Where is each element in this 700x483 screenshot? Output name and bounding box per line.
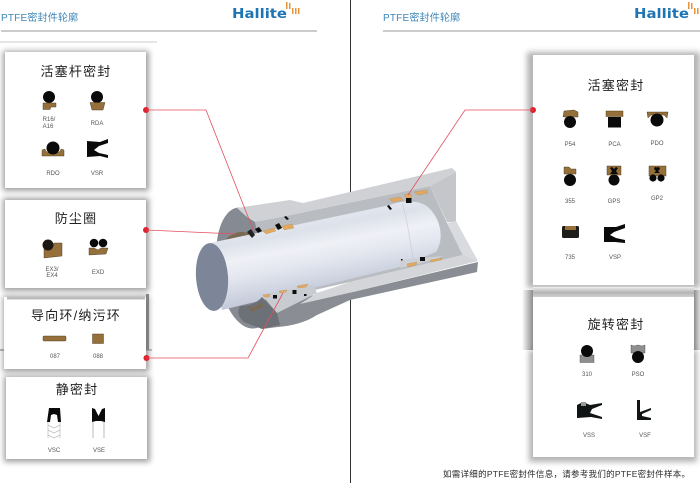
seal: VSP	[604, 224, 625, 261]
housing right lower cut face	[447, 221, 478, 261]
Hallite logo right: Hallite	[634, 6, 689, 22]
Hallite logo left	[232, 2, 300, 22]
seal: PDO	[647, 112, 668, 147]
housing inner bore	[255, 186, 463, 300]
housing lower outer wall	[262, 262, 478, 329]
seal: R16/A16: A16	[43, 124, 54, 130]
piston seals (orange)	[387, 190, 442, 267]
panel: piston rod seals	[3, 51, 149, 191]
panel: rotary seals	[522, 287, 700, 462]
heading: 活塞杆密封	[40, 64, 112, 79]
seal: 735: 735	[565, 255, 576, 261]
panel shadow band behind bearing rings panel	[0, 294, 152, 350]
seal: RDA	[90, 91, 105, 127]
seal: R16/A16	[43, 91, 56, 130]
seal groove shadow	[226, 232, 258, 252]
seal: VSE: VSE	[93, 448, 105, 454]
panel: piston seals	[527, 52, 700, 288]
heading: 静密封	[56, 382, 98, 397]
seal: VSF: VSF	[639, 433, 651, 439]
housing flange end face	[209, 204, 283, 332]
seal: GPS	[607, 166, 621, 205]
housing upper cut face	[237, 168, 456, 222]
heading: 导向环/纳污环	[31, 308, 121, 323]
piston lower seal carrier	[400, 256, 443, 268]
seal: P54: P54	[565, 142, 576, 148]
seal: 087: 087	[50, 354, 61, 360]
rod end face	[194, 242, 230, 312]
callout: piston seal leader	[408, 107, 536, 195]
seal: 735	[562, 226, 579, 261]
header title left: PTFE密封件轮廓	[1, 11, 78, 24]
callout: wiper leader	[143, 227, 236, 234]
seal: RDO	[42, 142, 64, 177]
heading: 防尘圈	[55, 211, 97, 226]
seal: 088	[92, 334, 104, 360]
seal: VSS: VSS	[583, 433, 595, 439]
seal: PDO: PDO	[650, 141, 664, 147]
Hallite logo left: Hallite	[232, 6, 287, 22]
seal: VSP: VSP	[609, 255, 621, 261]
seal: R16/A16: R16/	[43, 117, 56, 123]
heading: 旋转密封	[588, 317, 644, 332]
housing lower cut face	[300, 255, 478, 304]
seal: 087	[43, 336, 66, 360]
seal: RDA: RDA	[91, 121, 103, 127]
seal: PSO	[631, 345, 645, 378]
seal: VSE	[92, 408, 105, 454]
seal: RDO: RDO	[46, 171, 60, 177]
seal: EX3/EX4: EX3/	[45, 267, 59, 273]
seal: VSR: VSR	[91, 171, 104, 177]
seal: VSC	[47, 408, 61, 454]
panel: bearing rings / wear rings	[3, 296, 149, 372]
Hallite logo right	[634, 2, 698, 22]
seal: EX3/EX4	[42, 240, 62, 279]
seal: GP2	[649, 166, 666, 202]
seal: VSC: VSC	[48, 448, 61, 454]
seal: VSS	[577, 402, 602, 439]
seal: PCA: PCA	[608, 142, 621, 148]
seal: EXD	[89, 239, 108, 276]
seal: VSR	[87, 139, 108, 177]
panel: wiper seals	[3, 198, 149, 291]
seal: GPS: GPS	[608, 199, 620, 205]
callout: bearing ring leader	[144, 293, 283, 361]
seal: 088: 088	[93, 354, 104, 360]
footer note: 如需详细的PTFE密封件信息，请参考我们的PTFE密封件样本。	[443, 469, 690, 479]
header: right page	[383, 2, 700, 32]
rod seals (orange)	[247, 216, 308, 298]
seal: PSO: PSO	[632, 372, 645, 378]
seal: PCA	[606, 111, 623, 148]
lower rod seal carrier	[262, 285, 317, 313]
piston rod	[210, 201, 441, 310]
panel: static seals	[4, 376, 150, 462]
seal: EX3/EX4: EX4	[46, 273, 58, 279]
seal: GP2: GP2	[651, 196, 664, 202]
seal: 355	[564, 167, 576, 205]
cylinder cutaway illustration	[194, 168, 478, 332]
seal: P54	[563, 110, 578, 148]
seal: 310: 310	[582, 372, 593, 378]
header: left page	[0, 2, 317, 42]
seal: 310	[580, 345, 594, 378]
header title right: PTFE密封件轮廓	[383, 11, 460, 24]
seal: 355: 355	[565, 199, 576, 205]
heading: 活塞密封	[588, 78, 644, 93]
seal: VSF	[637, 400, 651, 439]
seal: EXD: EXD	[92, 270, 105, 276]
centre page divider	[350, 0, 351, 483]
callout: rod seal leader	[143, 107, 254, 232]
